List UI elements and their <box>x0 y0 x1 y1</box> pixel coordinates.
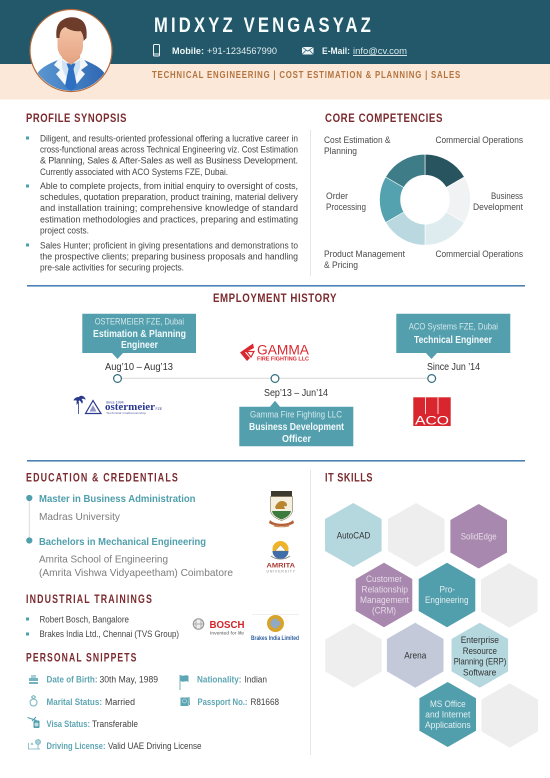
bullet list: profile text: & Planning, Sales & After-Sales as well as Business Development. <box>40 156 298 166</box>
driving license: Driving License: <box>46 741 106 751</box>
bullet list: profile text: Diligent, and results-oriented professional offering a lucrative career in <box>40 134 298 144</box>
hexagon: SolidEdge: SolidEdge <box>461 532 497 543</box>
passport number: Passport No.: <box>198 697 248 707</box>
hexagon: ERP software: Enterprise <box>461 635 499 646</box>
icon: envelope <box>302 47 314 54</box>
icon: ring <box>30 696 37 706</box>
logo: Gamma: FIRE FIGHTING LLC <box>257 356 309 362</box>
email address: info@cv.com <box>353 46 407 57</box>
tagline: TECHNICAL ENGINEERING | COST ESTIMATION & PLANNING | SALES <box>152 70 461 81</box>
logo: Gamma: GAMMA <box>257 342 309 358</box>
logo: Madras University crest <box>269 491 294 527</box>
hexagon: ERP software: Resource <box>463 646 497 657</box>
hexagon: MS Office: Applications <box>425 720 471 731</box>
hexagon: Pro-Engineering <box>419 563 475 627</box>
logo: ACO: ACO <box>415 414 449 428</box>
mobile number <box>172 46 277 57</box>
hexagon: AutoCAD: AutoCAD <box>337 530 370 542</box>
job card: Ostermeier: OSTERMEIER FZE, Dubai <box>95 316 184 326</box>
hexagon: CRM: Management <box>360 595 409 606</box>
panel: industrial trainings <box>26 594 299 642</box>
bullet list: profile text: schedules, quotation preparation, product training, material delivery <box>40 192 298 202</box>
logo: Amrita University: UNIVERSITY <box>266 570 296 574</box>
date of birth <box>46 674 158 684</box>
hexagon: Pro-Engineering: Engineering <box>425 595 468 606</box>
driving license <box>46 741 202 751</box>
training list <box>26 614 179 639</box>
nationality: Nationality: <box>197 674 242 684</box>
hexagon: ERP software: Software <box>463 668 496 678</box>
hexagon: MS Office: MS Office <box>430 699 466 710</box>
logo: Ostermeier: ostermeier <box>105 402 156 413</box>
icon: visa stamp <box>28 717 40 728</box>
donut labels: Development <box>473 202 523 213</box>
icon: passport <box>180 697 190 706</box>
marital status: Married <box>105 697 135 707</box>
training list: Brakes India Ltd., Chennai (TVS Group) <box>40 629 179 639</box>
bullet list: profile text <box>26 134 298 273</box>
icon: mobile phone <box>154 44 160 56</box>
bullet list: profile text: pre-sale activities for securing projects. <box>40 263 184 273</box>
visa status: Visa Status: <box>46 719 90 729</box>
hexagon: Arena <box>387 623 444 688</box>
logo: Ostermeier: Since 1994 <box>106 400 124 404</box>
heading: IT skills: IT SKILLS <box>325 472 373 484</box>
donut labels: Commercial Operations <box>436 135 523 146</box>
heading: employment history: EMPLOYMENT HISTORY <box>213 293 337 305</box>
degree: MBA <box>39 493 196 523</box>
nationality: Indian <box>244 674 267 684</box>
icon: flag <box>180 675 188 690</box>
donut labels: Processing <box>326 202 366 213</box>
degree: mechanical engineering: Bachelors in Mechanical Engineering <box>39 536 206 548</box>
panel: personal snippets <box>26 652 279 751</box>
job card: Gamma: Gamma Fire Fighting LLC <box>250 410 342 420</box>
heading: core competencies: CORE COMPETENCIES <box>325 113 443 125</box>
hexagon: MS Office: and Internet <box>425 710 471 720</box>
heading: personal snippets: PERSONAL SNIPPETS <box>26 652 138 664</box>
hexagon: ERP software <box>452 623 508 688</box>
bullet list: profile text: Currently associated with ACO Systems FZE, Dubai. <box>40 167 228 177</box>
job card: Ostermeier: Estimation & Planning <box>93 329 186 340</box>
degree: MBA: Madras University <box>39 511 121 523</box>
logo: Ostermeier: FZE <box>156 407 163 411</box>
passport number: R81668 <box>250 697 279 707</box>
email address <box>322 46 407 57</box>
timeline axis <box>114 375 436 382</box>
donut labels: Cost Estimation & <box>324 135 391 146</box>
heading: profile synopsis: PROFILE SYNOPSIS <box>26 113 127 125</box>
marital status: Marital Status: <box>46 697 102 707</box>
degree: MBA: Master in Business Administration <box>39 493 196 505</box>
donut labels: Commercial Operations <box>436 249 523 260</box>
training list: Robert Bosch, Bangalore <box>40 614 129 624</box>
education timeline markers <box>26 495 32 544</box>
date: Sep 13 to Jun 14: Sep’13 – Jun’14 <box>264 388 328 399</box>
degree: mechanical engineering <box>39 536 233 579</box>
hexagon: CRM: Customer <box>366 574 402 585</box>
portrait avatar <box>30 10 112 92</box>
bullet list: profile text: Able to complete projects, from initial enquiry to oversight of costs, <box>40 181 298 191</box>
job card: ACO <box>396 314 510 359</box>
date: Aug 10 to Aug 13: Aug’10 – Aug’13 <box>105 362 173 373</box>
hexagon: SolidEdge <box>450 504 507 568</box>
heading: industrial trainings: INDUSTRIAL TRAININGS <box>26 594 153 606</box>
hexagon: CRM <box>356 563 412 627</box>
bullet list: profile text: Sales Hunter; proficient in giving presentations and demonstrations to <box>40 240 298 250</box>
icon: birthday cake <box>28 675 39 684</box>
email address: E-Mail: <box>322 46 350 57</box>
panel: IT skills <box>325 472 538 748</box>
logo: Bosch: Invented for life <box>210 630 245 636</box>
bullet list: profile text: estimation methodologies and practices, preparing and estimating <box>40 214 298 224</box>
hexagon: Arena: Arena <box>404 650 427 662</box>
name title: MIDXYZ VENGASYAZ <box>154 14 374 37</box>
donut labels: Planning <box>324 146 357 157</box>
logo: Ostermeier: Technical Craftsmanship <box>106 411 146 415</box>
job card: Ostermeier <box>82 314 196 359</box>
donut labels: Order <box>326 191 348 202</box>
bullet list: profile text: and installation training; comprehensive knowledge of standard <box>40 203 298 213</box>
date: since Jun 14: Since Jun ’14 <box>427 362 480 373</box>
job card: Gamma: Officer <box>282 434 311 445</box>
job card: ACO: Technical Engineer <box>414 335 492 346</box>
visa status <box>46 719 138 729</box>
heading: education: EDUCATION & CREDENTIALS <box>26 472 179 484</box>
date of birth: 30th May, 1989 <box>100 674 158 684</box>
logo: Amrita University <box>266 541 296 574</box>
hexagon: ERP software: Planning (ERP) <box>454 656 506 668</box>
header banner <box>0 0 550 100</box>
logo: Ostermeier <box>74 396 163 415</box>
bullet list: profile text: project costs. <box>40 225 89 235</box>
job card: Gamma: Business Development <box>249 422 345 433</box>
visa status: Transferable <box>92 719 138 729</box>
logo: Bosch: BOSCH <box>210 620 244 631</box>
panel: profile synopsis <box>26 113 298 273</box>
hexagon: Pro-Engineering: Pro- <box>440 584 455 596</box>
hexagon: CRM: (CRM) <box>372 606 396 616</box>
job card: Gamma <box>239 401 353 446</box>
logo: Brakes India: Brakes India Limited <box>251 635 299 642</box>
bullet list: profile text: cross-functional areas across Technical Engineering viz. Cost Estimation <box>40 145 298 155</box>
icon: driving license <box>28 740 40 749</box>
logo: Brakes India <box>251 614 299 642</box>
panel: employment history <box>74 293 510 446</box>
date of birth: Date of Birth: <box>46 674 98 684</box>
logo: Amrita University: AMRITA <box>266 564 296 570</box>
bullet list: profile text: the prospective clients; preparing business proposals and handling <box>40 252 298 262</box>
hexagon: MS Office <box>419 682 476 747</box>
job card: Ostermeier: Engineer <box>121 340 158 351</box>
job card: ACO: ACO Systems FZE, Dubai <box>409 322 498 332</box>
driving license: Valid UAE Driving License <box>108 741 202 751</box>
hexagon: CRM: Relationship <box>362 584 408 596</box>
degree: mechanical engineering: Amrita School of Engineering <box>39 554 168 566</box>
mobile number: +91-1234567990 <box>207 46 277 57</box>
logo: Gamma <box>240 342 309 362</box>
donut labels: & Pricing <box>324 260 358 271</box>
donut labels: Product Management <box>324 249 405 260</box>
logo: Bosch <box>193 619 245 636</box>
mobile number: Mobile: <box>172 46 204 57</box>
panel: core competencies <box>324 113 523 271</box>
degree: mechanical engineering: (Amrita Vishwa Vidyapeetham) Coimbatore <box>39 567 233 579</box>
logo: ACO <box>413 397 451 428</box>
donut labels: Business <box>491 191 523 202</box>
panel: education and credentials <box>26 472 296 579</box>
donut labels <box>324 135 523 271</box>
hexagon: AutoCAD <box>325 503 382 567</box>
donut chart <box>380 154 470 245</box>
